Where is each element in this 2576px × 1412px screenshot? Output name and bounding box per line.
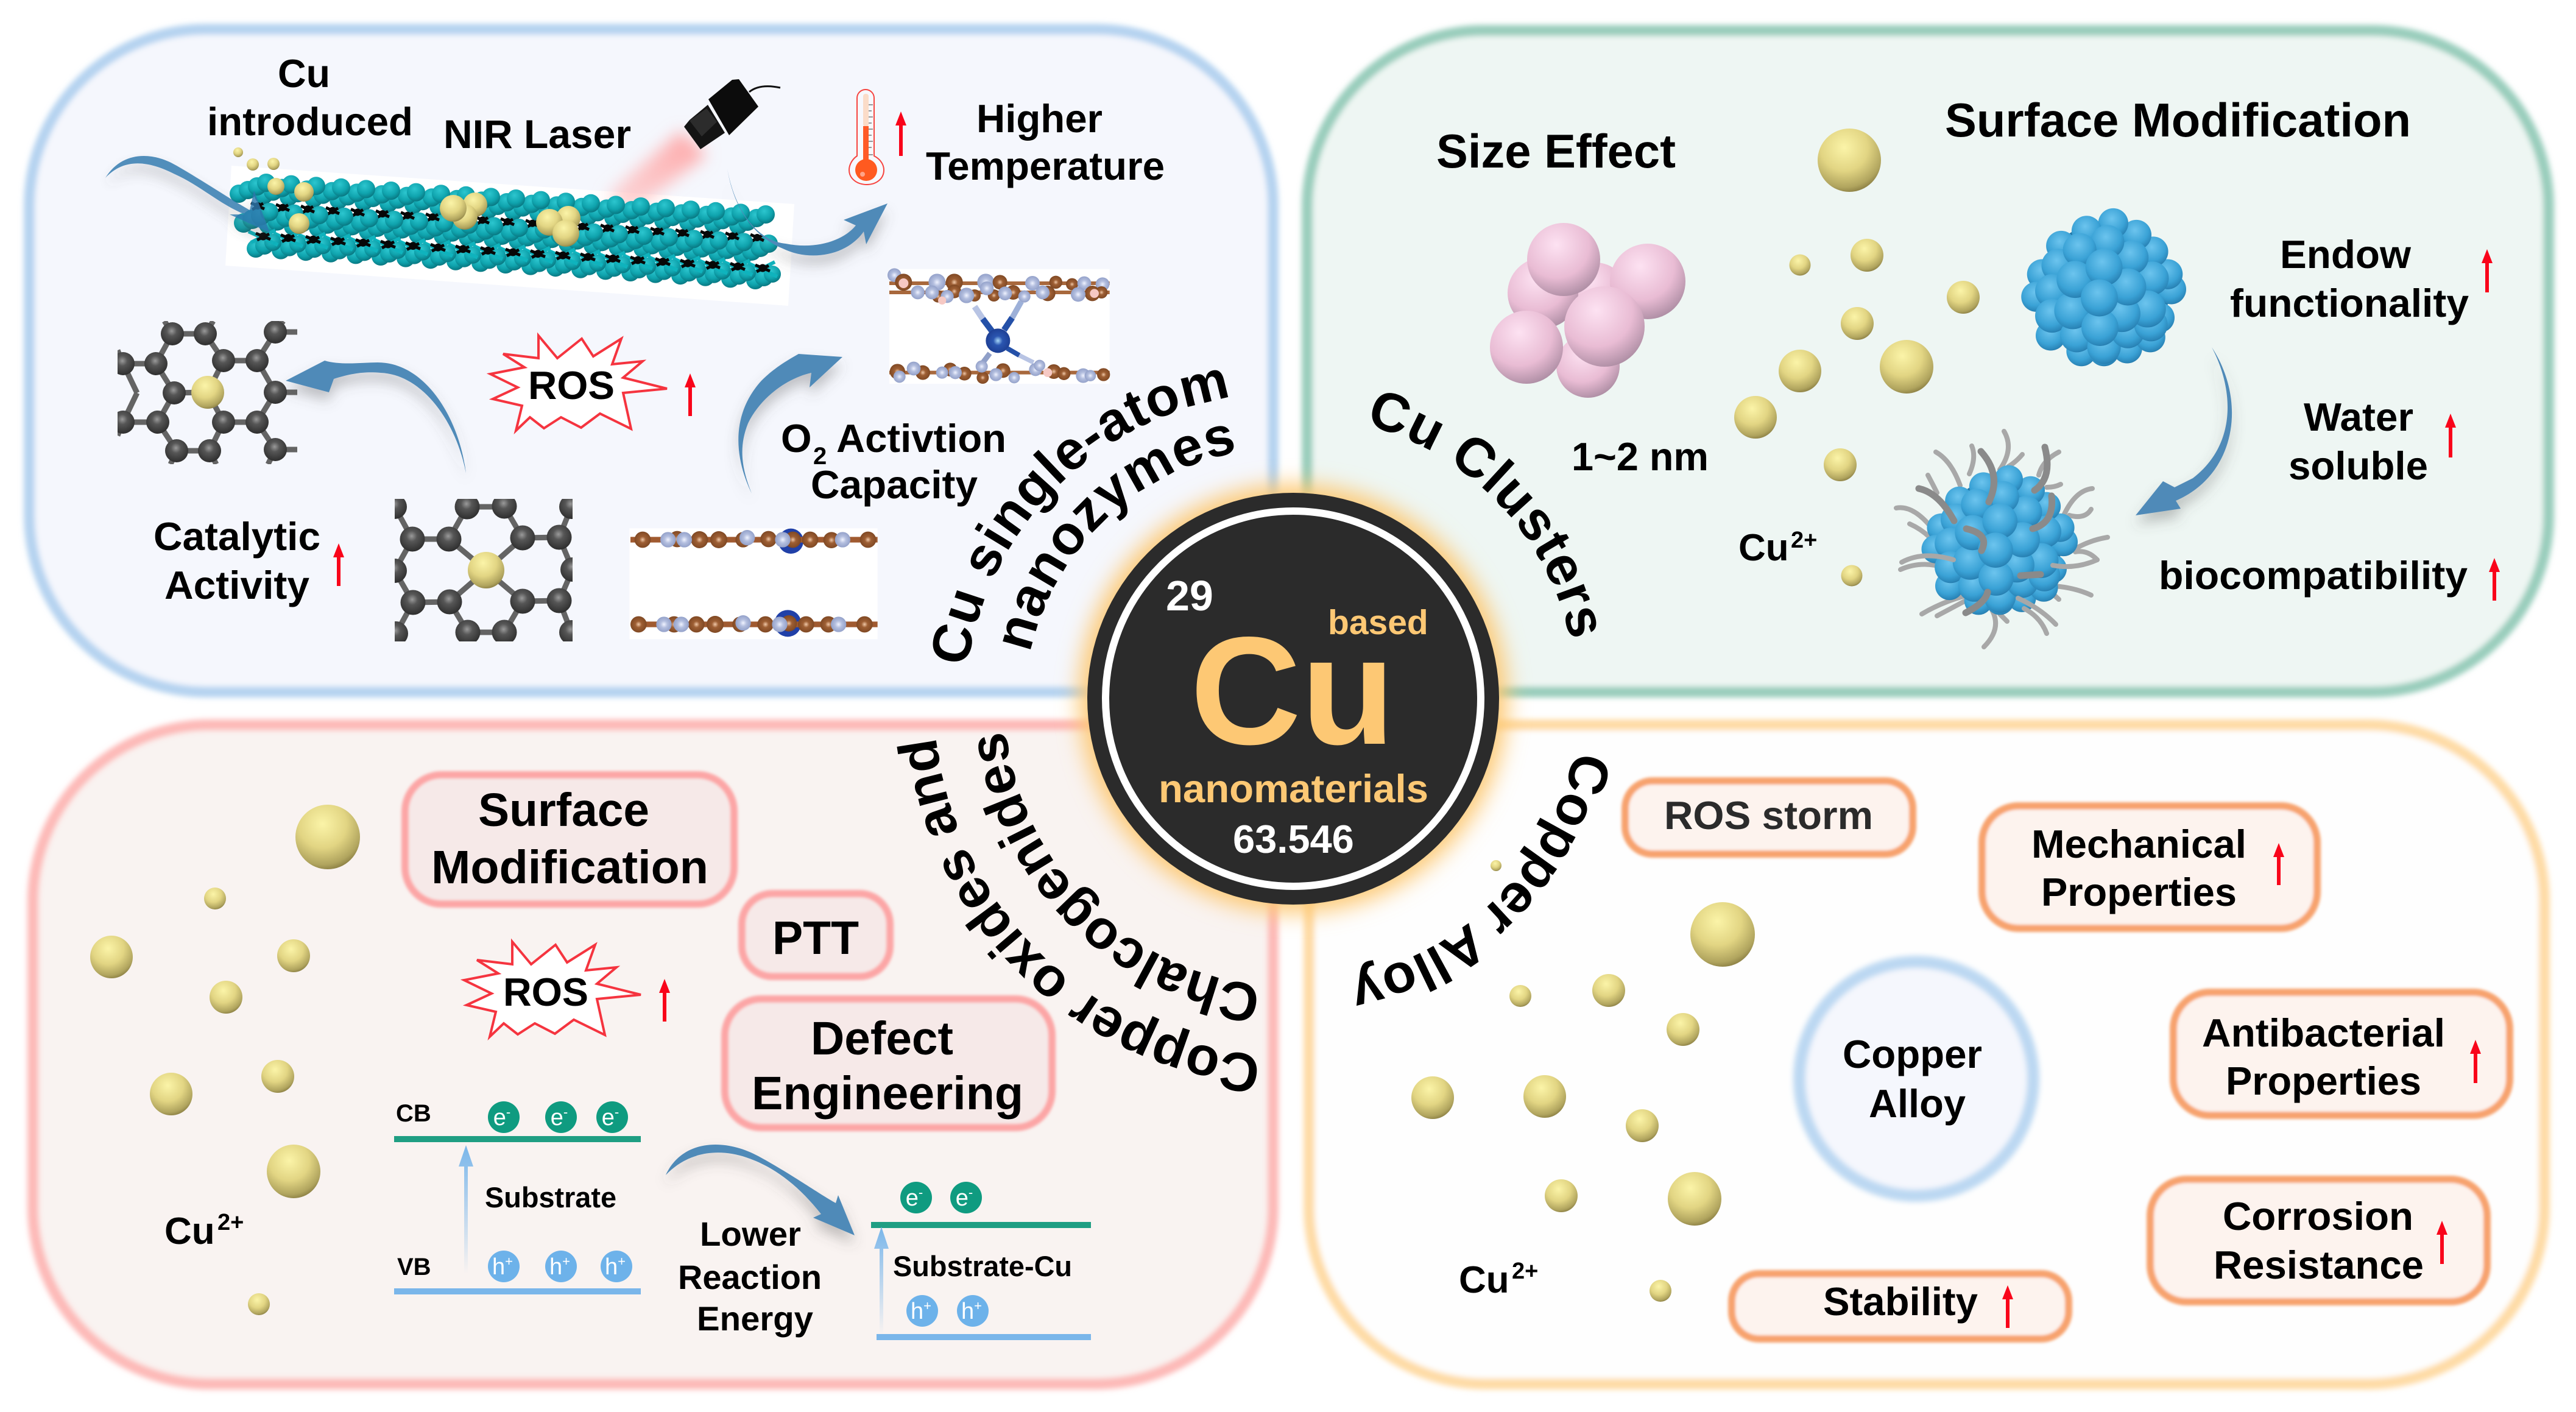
laser beam — [606, 131, 707, 213]
box: Mechanical Properties: Properties — [2041, 870, 2237, 914]
icon: thermometer — [849, 90, 884, 185]
label: 1~2 nm: 1~2 nm — [1572, 434, 1709, 479]
box: Defect Engineering: Engineering — [752, 1067, 1023, 1120]
icon: ROS burst — [464, 942, 641, 1037]
circle: Copper Alloy: Copper — [1843, 1032, 1982, 1076]
band diagram: substrate: - — [615, 1104, 619, 1120]
box: ROS storm: ROS storm — [1664, 793, 1873, 838]
label: O2 Activtion Capacity: Activtion — [836, 416, 1006, 461]
arrow: to substrate-Cu — [666, 1145, 855, 1235]
arrow: Cu into sheet — [105, 156, 270, 233]
molecule: carbon nitride with Cu, upper right — [887, 268, 1110, 384]
box: Corrosion Resistance: Corrosion — [2223, 1194, 2413, 1238]
icon: laser device — [684, 79, 780, 149]
label: O2 Activtion Capacity — [781, 416, 1006, 507]
band diagram: substrate: h — [605, 1254, 618, 1280]
atomic mass: 63.546 — [1233, 817, 1354, 861]
box: Stability — [1732, 1274, 2069, 1339]
molecule: graphene with Cu, lower — [395, 499, 573, 641]
box: Surface Modification: Modification — [431, 841, 708, 894]
gold spheres — [1734, 129, 1980, 586]
band diagram: substrate — [394, 1100, 641, 1294]
blue nanoparticle — [2021, 208, 2186, 366]
modified nanoparticle with ligands — [1896, 431, 2108, 647]
atomic number: 29 — [1166, 572, 1213, 620]
panel: Copper oxides and chalcogenides — [33, 725, 1273, 1384]
band diagram: substrate: e — [493, 1105, 506, 1131]
label: Cu introduced: Cu — [278, 51, 330, 96]
band diagram: substrate: - — [563, 1104, 568, 1120]
label: Endow functionality: Endow — [2280, 232, 2411, 277]
central badge: Cu element — [1079, 484, 1508, 913]
label: Lower Reaction Energy: Energy — [697, 1299, 813, 1338]
arrow: surface modification — [2136, 347, 2232, 515]
band diagram: substrate-Cu: Substrate-Cu — [893, 1250, 1072, 1282]
label: Higher Temperature: Higher — [976, 96, 1103, 141]
label: Higher Temperature: Temperature — [926, 144, 1165, 188]
label: Lower Reaction Energy — [678, 1215, 822, 1338]
band diagram: substrate-Cu: e — [956, 1185, 969, 1211]
arrow up: water soluble — [2445, 414, 2456, 457]
box: Antibacterial Properties: Antibacterial — [2202, 1011, 2445, 1055]
label: Cu2+: Cu — [164, 1210, 215, 1252]
band diagram: substrate: e — [602, 1105, 615, 1131]
box: Mechanical Properties — [1982, 806, 2317, 928]
band diagram: substrate: + — [505, 1254, 513, 1269]
label: Lower Reaction Energy: Reaction — [678, 1258, 822, 1296]
arrow up: functionality — [2482, 249, 2493, 292]
label: Cu2+: 2+ — [1791, 528, 1817, 553]
label: Cu2+: Cu — [1738, 527, 1789, 569]
box: Corrosion Resistance — [2150, 1179, 2487, 1302]
heading: Size Effect: Size Effect — [1436, 124, 1676, 178]
box: Antibacterial Properties — [2173, 992, 2510, 1115]
band diagram: substrate-Cu: e — [906, 1185, 919, 1211]
band diagram: substrate: VB — [397, 1254, 431, 1280]
panel: Copper alloy — [1309, 725, 2544, 1384]
band diagram: substrate: + — [618, 1254, 626, 1269]
label: Cu2+: 2+ — [1512, 1258, 1538, 1284]
box: Antibacterial Properties: Properties — [2226, 1059, 2421, 1103]
label: Cu2+ — [1738, 527, 1817, 569]
curved title: Cu single-atom: Cu single-atom — [933, 370, 1228, 662]
label: Catalytic Activity: Catalytic — [154, 514, 320, 559]
box: Defect Engineering: Defect — [811, 1012, 953, 1065]
sheet background — [225, 166, 794, 306]
band diagram: substrate: h — [549, 1254, 562, 1280]
label: Endow functionality: functionality — [2230, 281, 2469, 325]
label: based: based — [1328, 603, 1428, 642]
crystal atoms — [230, 174, 781, 289]
gold spheres — [1411, 860, 1755, 1302]
band diagram: substrate-Cu: + — [974, 1298, 982, 1313]
box: Defect Engineering — [725, 999, 1052, 1128]
curved title: nanozymes: nanozymes — [1003, 426, 1234, 649]
curved title: Copper oxides and: Copper oxides and — [897, 740, 1257, 1092]
band diagram: substrate-Cu: + — [923, 1298, 931, 1313]
gold spheres — [90, 805, 360, 1315]
arrow up: biocompatibility — [2489, 558, 2500, 601]
box: PTT: PTT — [772, 912, 859, 964]
band diagram: substrate-Cu: h — [961, 1299, 974, 1324]
box: Corrosion Resistance: Resistance — [2214, 1243, 2424, 1287]
label: O2 Activtion Capacity: 2 — [813, 443, 827, 470]
molecule: carbon nitride, lower — [629, 528, 878, 639]
label: biocompatibility: biocompatibility — [2159, 553, 2468, 598]
box: Mechanical Properties: Mechanical — [2031, 822, 2246, 866]
label: Water soluble: soluble — [2288, 443, 2428, 488]
label: NIR Laser: NIR Laser — [443, 111, 631, 157]
label: Lower Reaction Energy: Lower — [700, 1215, 801, 1253]
band diagram: substrate-Cu: h — [911, 1299, 923, 1324]
band diagram: substrate: e — [551, 1105, 563, 1131]
arrow up: temperature — [895, 111, 906, 156]
label: Catalytic Activity — [154, 514, 320, 607]
label: Water soluble — [2288, 395, 2428, 488]
arrow up: ROS — [659, 979, 670, 1022]
pink cluster — [1490, 223, 1685, 398]
panel: Cu clusters — [1307, 30, 2549, 692]
panel: Cu single-atom nanozymes — [29, 29, 1273, 692]
label: Water soluble: Water — [2304, 395, 2413, 439]
icon: ROS burst — [490, 336, 667, 431]
box: PTT — [742, 894, 890, 976]
arrow: sheet to temperature — [727, 169, 887, 255]
label: Cu introduced — [207, 51, 413, 144]
arrow: to upper graphene — [286, 361, 466, 473]
circle: Copper Alloy — [1799, 962, 2033, 1196]
box: Surface Modification — [405, 775, 734, 904]
label: Cu2+ — [164, 1210, 244, 1252]
icon: ROS burst: ROS — [503, 970, 588, 1014]
curved title: Copper Alloy: Copper Alloy — [1356, 757, 1608, 1006]
molecule: graphene with Cu, upper — [111, 320, 297, 464]
icon: ROS burst: ROS — [528, 363, 615, 408]
symbol: Cu: Cu — [1190, 605, 1395, 777]
band diagram: substrate-Cu — [871, 1182, 1091, 1340]
label: nanomaterials: nanomaterials — [1159, 766, 1428, 811]
Cu atoms on sheet — [233, 147, 580, 247]
label: Catalytic Activity: Activity — [164, 563, 309, 607]
band diagram: substrate: + — [562, 1254, 570, 1269]
arrow: to upper right molecule — [738, 354, 842, 493]
heading: Surface Modification: Surface Modification — [1945, 93, 2411, 147]
band diagram: substrate: Substrate — [485, 1181, 616, 1213]
label: Cu introduced: introduced — [207, 99, 413, 144]
circle: Copper Alloy: Alloy — [1869, 1081, 1966, 1126]
label: Endow functionality — [2230, 232, 2469, 325]
label: Cu2+ — [1459, 1258, 1538, 1301]
curved title: Chalcogenides: Chalcogenides — [978, 734, 1256, 1021]
label: O2 Activtion Capacity: O — [781, 416, 812, 461]
curved title: Cu Clusters: Cu Clusters — [1372, 393, 1596, 637]
band diagram: substrate: CB — [396, 1100, 431, 1127]
label: Higher Temperature — [926, 96, 1165, 188]
box: Surface Modification: Surface — [478, 784, 649, 836]
arrow up: ROS — [685, 373, 696, 416]
band diagram: substrate-Cu: - — [969, 1185, 973, 1200]
label: Cu2+: 2+ — [217, 1210, 244, 1235]
band diagram: substrate: - — [506, 1104, 510, 1120]
box: Stability: Stability — [1823, 1279, 1978, 1324]
label: Cu2+: Cu — [1459, 1259, 1509, 1301]
label: O2 Activtion Capacity: Capacity — [811, 462, 978, 507]
arrow up: catalytic — [333, 543, 344, 586]
band diagram: substrate-Cu: - — [919, 1185, 923, 1200]
band diagram: substrate: h — [492, 1254, 505, 1280]
box: ROS storm — [1625, 781, 1913, 854]
